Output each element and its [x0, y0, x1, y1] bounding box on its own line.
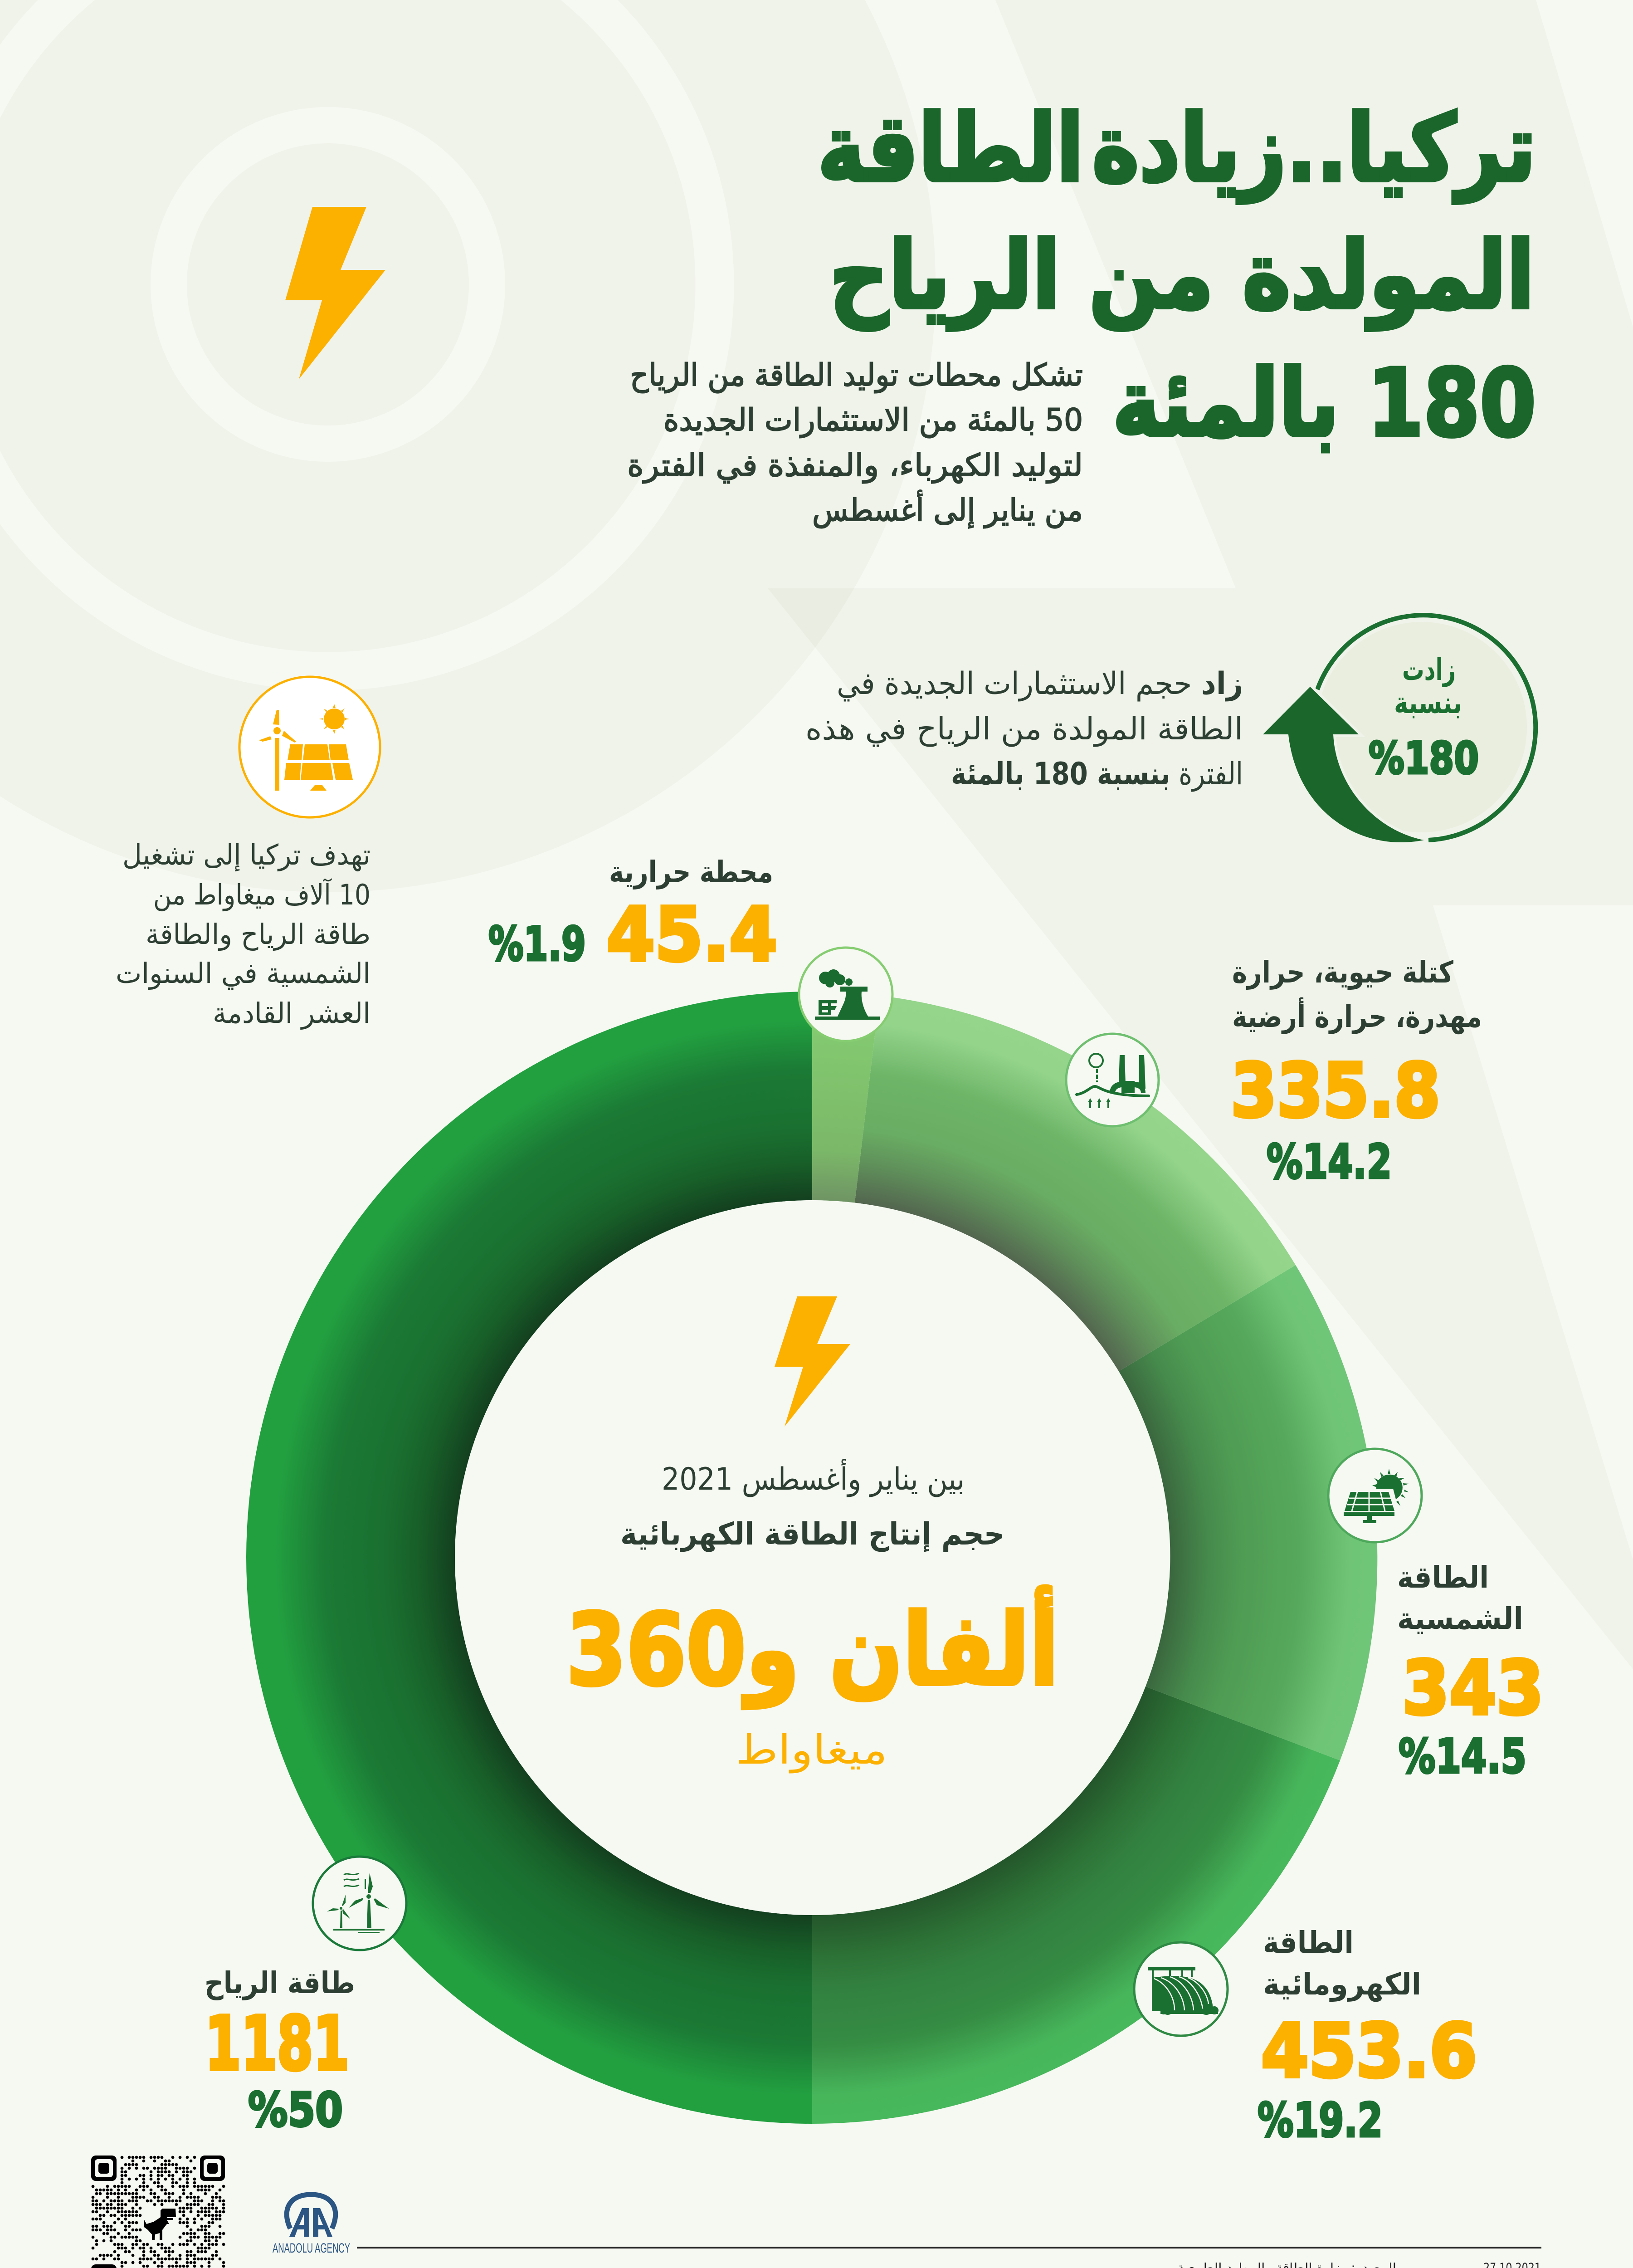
icon: QR dinosaur [144, 2209, 176, 2240]
title: تركيا..زيادة الطاقة [818, 95, 1536, 203]
hydro label: الكهرومائية [1263, 1967, 1421, 2002]
biomass label: مهدرة، حرارة أرضية [1232, 997, 1482, 1035]
text: period: بين يناير وأغسطس 2021 [662, 1459, 965, 1497]
solar value: 343 [1402, 1646, 1544, 1731]
center text block [566, 1296, 1059, 1774]
callout text [1369, 652, 1479, 784]
hydro value: 453.6 [1261, 2009, 1477, 2094]
title: المولدة من الرياح [829, 222, 1535, 330]
thermal value: 45.4 [607, 892, 777, 978]
title [818, 95, 1536, 458]
intro text: من يناير إلى أغسطس [812, 490, 1083, 528]
solar label: الشمسية [1397, 1601, 1523, 1636]
title: 180 بالمئة [1112, 350, 1536, 458]
text: investments increase [805, 666, 1243, 792]
callout ring [1317, 615, 1536, 840]
wind value: 1181 [205, 2001, 349, 2087]
biomass label: كتلة حيوية، حرارة [1232, 955, 1454, 990]
icon: wind and solar [239, 677, 380, 817]
hydro group [1134, 1925, 1477, 2148]
callout text: زادت [1402, 652, 1456, 687]
icon: geothermal [1066, 1034, 1159, 1126]
text: target [116, 838, 370, 1030]
intro text: 50 بالمئة من الاستثمارات الجديدة [663, 402, 1083, 438]
text: investments increase: الفترة بنسبة 180 بالمئة [951, 756, 1243, 792]
hydro label [1263, 1925, 1421, 2002]
text: investments increase: زاد حجم الاستثمارات الجديدة في [837, 666, 1243, 702]
segment: thermal 1.9% [812, 992, 880, 1203]
callout disk [1316, 622, 1527, 832]
solar label: الطاقة [1397, 1560, 1489, 1595]
callout text: %180 [1369, 733, 1479, 784]
text: unit: ميغاواط [736, 1726, 887, 1774]
intro text: لتوليد الكهرباء، والمنفذة في الفترة [627, 448, 1083, 484]
QR code [91, 2156, 225, 2268]
icon: center bolt [775, 1296, 850, 1427]
segment: biomass 14.2% [855, 996, 1296, 1371]
thermal group [488, 855, 892, 1041]
solar percent: %14.5 [1399, 1730, 1526, 1784]
text: target: العشر القادمة [213, 997, 370, 1030]
thermal percent: %1.9 [488, 917, 586, 972]
text: target: طاقة الرياح والطاقة [146, 918, 370, 951]
logo: Anadolu Agency: ANADOLU AGENCY [273, 2241, 350, 2256]
text: target: تهدف تركيا إلى تشغيل [122, 838, 370, 872]
intro text [627, 357, 1083, 528]
biomass percent: %14.2 [1267, 1135, 1392, 1189]
icon: solar panel [1328, 1449, 1422, 1542]
callout text: بنسبة [1394, 685, 1462, 720]
biomass label [1232, 955, 1482, 1035]
text: target: 10 آلاف ميغاواط من [153, 878, 370, 911]
text: production label: حجم إنتاج الطاقة الكهربائية [620, 1516, 1004, 1552]
hydro label: الطاقة [1263, 1925, 1354, 1960]
solar group [1328, 1449, 1544, 1784]
thermal label: محطة حرارية [609, 855, 773, 890]
segment: hydro 19.2% [812, 1686, 1340, 2124]
icon: wind turbines [313, 1857, 406, 1950]
icon: hydro dam [1134, 1942, 1228, 2036]
callout: increase circle with arrow [1263, 615, 1536, 842]
solar label [1397, 1560, 1523, 1636]
biomass value: 335.8 [1231, 1048, 1440, 1134]
arrow: growth [1263, 687, 1424, 842]
hydro percent: %19.2 [1258, 2093, 1383, 2148]
icon: lightning bolt [285, 207, 385, 379]
wind group [205, 1857, 406, 2137]
biomass group [1066, 955, 1482, 1189]
wind percent: %50 [248, 2083, 343, 2137]
text: investments increase: الطاقة المولدة من الرياح في هذه [805, 711, 1243, 747]
text: target: الشمسية في السنوات [116, 957, 370, 990]
center disk [455, 1200, 1170, 1915]
wind label: طاقة الرياح [205, 1965, 355, 2000]
logo: Anadolu Agency [273, 2195, 350, 2256]
intro text: تشكل محطات توليد الطاقة من الرياح [630, 357, 1083, 393]
text: total value: ألفان و360 [566, 1586, 1059, 1709]
segment: solar 14.5% [1119, 1265, 1377, 1760]
donut chart [246, 992, 1377, 2124]
icon: thermal plant [799, 948, 892, 1041]
segment: wind 50% [246, 992, 812, 2124]
